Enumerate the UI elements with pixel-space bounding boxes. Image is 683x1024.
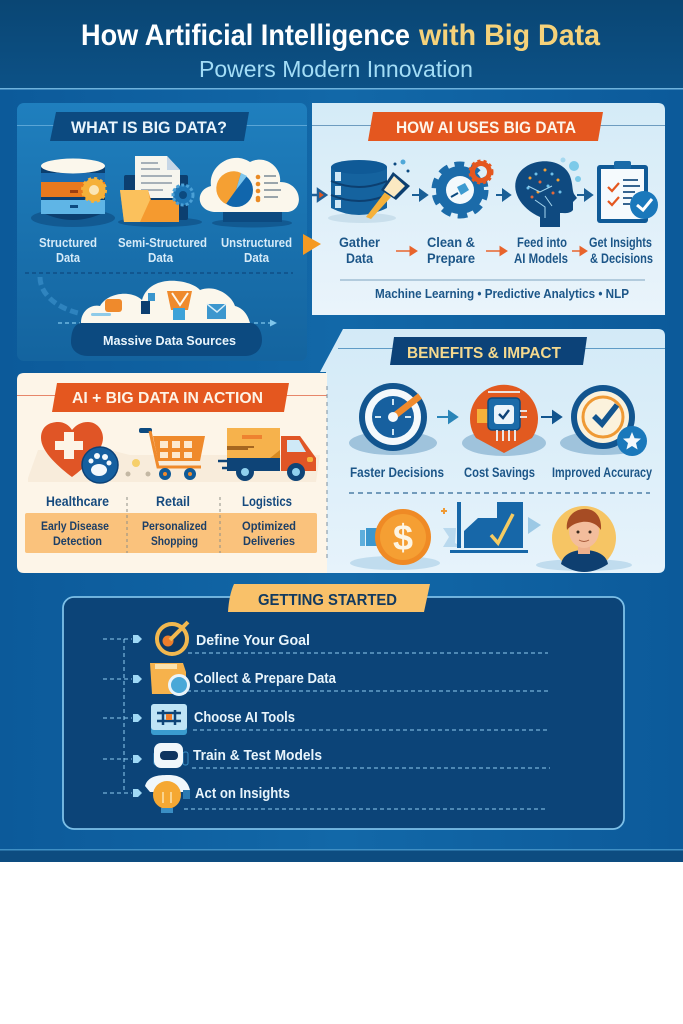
heading: benefits and impact: BENEFITS & IMPACT <box>407 345 561 362</box>
icon: growth factory <box>441 502 541 553</box>
outcome: early disease detection: Detection <box>53 536 102 548</box>
panel: benefits and impact <box>320 329 665 573</box>
label: gather data <box>339 235 381 266</box>
heading: how ai uses big data: HOW AI USES BIG DATA <box>396 119 576 137</box>
label: unstructured data <box>221 236 292 265</box>
heading: getting started: GETTING STARTED <box>258 592 397 609</box>
label: structured data <box>39 236 97 265</box>
icon: folder magnifier <box>150 663 188 694</box>
icon: logistics truck <box>218 428 316 481</box>
icon: healthcare heart <box>41 422 118 483</box>
pill: massive data sources <box>71 323 262 356</box>
icon: gather data database <box>328 160 410 223</box>
label: clean and prepare: Clean & <box>427 235 475 250</box>
icon: ai brain head <box>515 158 581 227</box>
arrow: data to ai orange <box>303 234 321 255</box>
title: How Artificial Intelligence <box>81 19 410 52</box>
icon: robot head <box>154 743 188 768</box>
outcomes band <box>25 497 317 553</box>
outcome: personalized shopping <box>142 521 207 548</box>
icon: clipboard insights <box>597 161 658 223</box>
heading: what is big data: WHAT IS BIG DATA? <box>71 119 227 137</box>
label: semi-structured data: Semi-Structured <box>118 236 207 250</box>
label: feed into ai models <box>514 235 568 266</box>
heading: ai and big data in action: AI + BIG DATA IN ACTION <box>72 390 263 407</box>
arrow: savings to accuracy <box>541 412 561 422</box>
label: get insights and decisions <box>589 235 653 266</box>
label: clean and prepare <box>427 235 475 266</box>
outcome: optimized deliveries: Deliveries <box>243 536 295 548</box>
label: unstructured data: Data <box>244 251 270 265</box>
icon: target goal <box>157 622 188 654</box>
icon: unstructured cloud <box>200 158 299 228</box>
outcome: early disease detection <box>41 521 109 548</box>
label: improved accuracy: Improved Accuracy <box>552 465 652 480</box>
arrow: data to ai red <box>312 190 326 200</box>
icon: structured data database <box>31 158 115 227</box>
panel: what is big data <box>17 103 307 361</box>
label: gather data: Gather <box>339 235 381 250</box>
icon: robot with lightbulb <box>145 775 190 813</box>
label: faster decisions: Faster Decisions <box>350 465 444 480</box>
icon: retail cart <box>126 428 205 480</box>
icon: data sources cloud <box>58 281 277 326</box>
techniques text: Machine Learning • Predictive Analytics • NLP <box>375 287 629 301</box>
label: feed into ai models: Feed into <box>517 235 567 250</box>
outcome: early disease detection: Early Disease <box>41 521 109 533</box>
arrow: gather to clean <box>412 190 427 200</box>
pill: massive data sources: Massive Data Sources <box>103 333 236 348</box>
heading: what is big data <box>50 112 249 141</box>
connector lines <box>103 639 550 809</box>
heading: how ai uses big data <box>368 112 603 141</box>
connector dots <box>133 635 142 797</box>
outcome: optimized deliveries: Optimized <box>242 521 296 533</box>
heading: getting started <box>228 584 430 612</box>
icon: clean gear <box>436 161 492 214</box>
icon: improved accuracy badge <box>560 385 647 456</box>
subtitle: Powers Modern Innovation <box>199 56 473 82</box>
icon: ai tools chip <box>151 704 187 735</box>
icon: semi-structured folder <box>118 156 202 227</box>
label: gather data: Data <box>346 251 373 266</box>
arrows: steps row <box>396 246 587 256</box>
label: healthcare: Healthcare <box>46 494 109 509</box>
panel: ai and big data in action <box>17 373 327 573</box>
outcome: personalized shopping: Shopping <box>151 536 198 548</box>
label: unstructured data: Unstructured <box>221 236 292 250</box>
label: get insights and decisions: Get Insights <box>589 235 652 250</box>
icon: faster decisions clock <box>349 383 437 455</box>
title highlight: with Big Data <box>418 19 600 52</box>
label: retail: Retail <box>156 494 190 509</box>
heading: benefits and impact <box>390 337 587 365</box>
label: semi-structured data: Data <box>148 251 174 265</box>
label: clean and prepare: Prepare <box>427 251 475 266</box>
icon: person avatar <box>536 506 632 572</box>
label: structured data: Structured <box>39 236 97 250</box>
label: cost savings: Cost Savings <box>464 465 535 480</box>
arrow: faster to savings <box>437 412 457 422</box>
panel: getting started <box>63 584 624 829</box>
panel: how ai uses big data <box>312 103 665 315</box>
header band <box>0 0 683 90</box>
row: collect and prepare data: Collect & Prepare Data <box>194 671 337 687</box>
row: choose ai tools: Choose AI Tools <box>194 710 295 726</box>
arrow: feed to insights <box>577 190 592 200</box>
label: feed into ai models: AI Models <box>514 251 568 266</box>
row: act on insights: Act on Insights <box>195 786 290 802</box>
arrow: clean to feed <box>496 190 510 200</box>
row: define your goal: Define Your Goal <box>196 633 310 649</box>
label: semi-structured data <box>118 236 207 265</box>
row: train and test models: Train & Test Models <box>193 748 322 764</box>
icon: dollar coin <box>350 509 440 570</box>
label: structured data: Data <box>56 251 81 265</box>
label: logistics: Logistics <box>242 494 292 509</box>
icon: dollar coin: $ <box>393 517 413 558</box>
ground shadow <box>28 450 320 482</box>
outcome: optimized deliveries <box>242 521 296 548</box>
outcome: personalized shopping: Personalized <box>142 521 207 533</box>
heading: ai and big data in action <box>52 383 289 412</box>
icon: cost savings chip <box>462 385 546 456</box>
label: get insights and decisions: & Decisions <box>590 251 653 266</box>
